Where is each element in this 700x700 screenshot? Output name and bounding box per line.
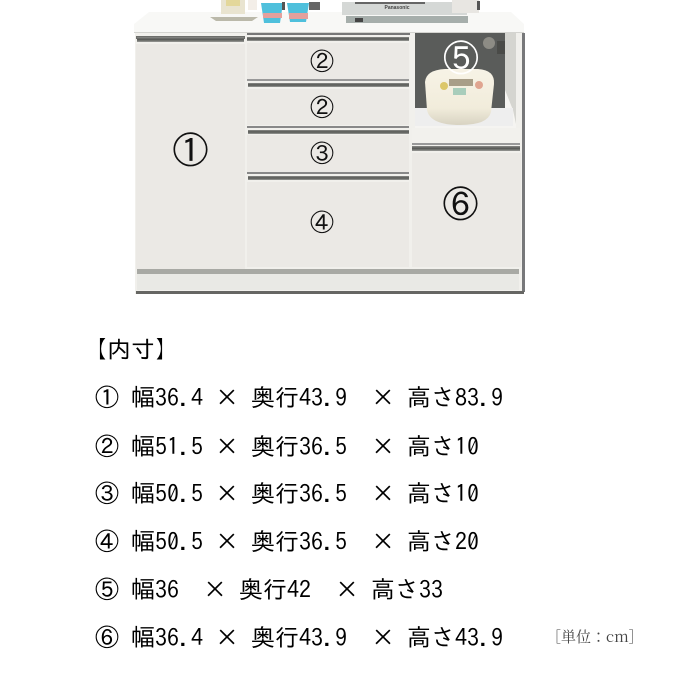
open shelf with rice cooker: ⑤ <box>443 38 479 79</box>
dimension row 6: ⑥ 幅36.4 × 奥行43.9 × 高さ43.9 <box>95 625 503 649</box>
countertop <box>134 12 524 33</box>
drawer 2 upper: ② <box>310 49 334 76</box>
drawer 3: ③ <box>310 141 334 168</box>
dimension row 2: ② 幅51.5 × 奥行36.5 × 高さ10 <box>95 434 479 458</box>
door 6 <box>412 128 521 267</box>
items on countertop <box>210 0 480 23</box>
rice cooker <box>425 69 494 125</box>
drawer 4: ④ <box>310 210 334 237</box>
dimension row 1: ① 幅36.4 × 奥行43.9 × 高さ83.9 <box>95 385 503 409</box>
open shelf with rice cooker <box>415 33 516 128</box>
plinth <box>137 269 519 290</box>
door 6: ⑥ <box>442 184 478 225</box>
drawer 2 lower: ② <box>310 95 334 122</box>
dimension row 4: ④ 幅50.5 × 奥行36.5 × 高さ20 <box>95 529 479 553</box>
dimension row 3: ③ 幅50.5 × 奥行36.5 × 高さ10 <box>95 481 479 505</box>
heading: 【内寸】 <box>83 337 179 361</box>
illustration: white kitchen cabinet <box>134 0 525 294</box>
dimension row 5: ⑤ 幅36 × 奥行42 × 高さ33 <box>95 577 443 601</box>
cabinet body <box>135 33 523 294</box>
drawer 2 lower <box>247 79 409 125</box>
drawer 4 <box>247 172 409 267</box>
drawer 2 upper <box>247 33 410 79</box>
door 1 <box>136 36 245 269</box>
items on countertop: Panasonic <box>384 5 410 11</box>
drawer 3 <box>247 126 409 172</box>
door 1: ① <box>172 130 208 171</box>
unit note: ［単位：cm］ <box>546 626 644 647</box>
